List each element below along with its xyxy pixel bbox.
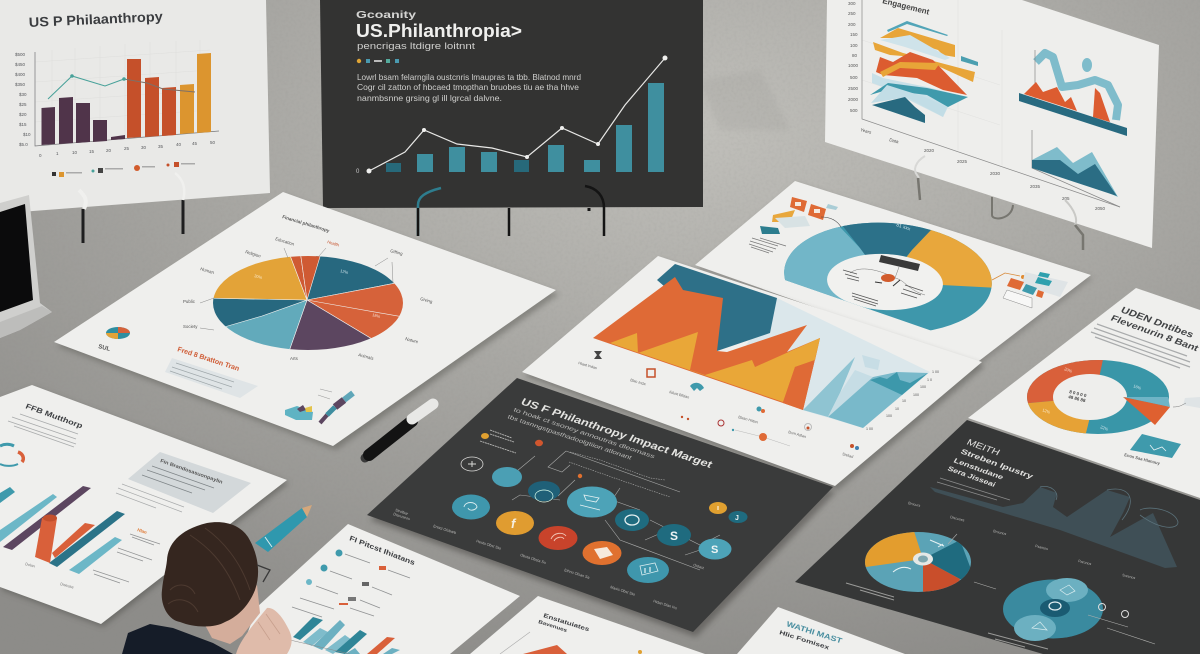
panel: bottom-center sheet (470, 596, 705, 654)
y-axis ticks: 10 (902, 399, 906, 403)
legend icons row: Hlaat Indas (578, 361, 597, 370)
bar chart: $450 (15, 62, 26, 67)
icons: right side tags (992, 272, 1068, 308)
ribbon area chart (1019, 50, 1127, 136)
chart legend (52, 162, 195, 177)
panel: donut chart sheet (695, 181, 1093, 369)
indicator list (292, 550, 410, 617)
small markers (461, 430, 582, 478)
timeline labels: Sorenos (1122, 573, 1136, 580)
legend icons row: Bum Adlan (788, 430, 806, 439)
y-axis ticks: 1 00 (866, 427, 873, 431)
bottom-center title: Bavenues (537, 619, 568, 634)
impact circles (452, 467, 748, 583)
combo chart (356, 56, 668, 175)
bar chart: 20 (106, 148, 112, 153)
legend icons row: Sisitad (842, 452, 854, 459)
axis labels: Data (889, 137, 900, 145)
panel: pie chart sheet (54, 192, 559, 450)
panel: right donut sheet (968, 288, 1200, 498)
pie labels: 12% (340, 268, 349, 275)
circle captions: Ethno Olsan Sa (564, 568, 591, 580)
impact circles: f (511, 516, 517, 531)
axis labels: 205 (1062, 196, 1070, 201)
small area chart (1032, 130, 1120, 207)
bar chart: 40 (176, 142, 182, 147)
axis labels: 100 (850, 43, 858, 48)
bottom-right title: WATHI MAST (785, 619, 844, 645)
small pie icon (98, 327, 130, 353)
mountain silhouette chart (930, 478, 1178, 568)
axis labels: 2500 (848, 86, 859, 91)
bar chart: $5.0 (19, 142, 28, 147)
y-axis ticks: 100 (886, 414, 892, 418)
bar chart: $15 (19, 122, 27, 127)
pie labels: Health (327, 239, 340, 248)
pie labels: Financial philanthropy (282, 214, 330, 233)
circle captions: Hesta Obst Sta (476, 539, 502, 551)
bar chart: 0 (39, 153, 42, 158)
dark sheet heading (946, 437, 1036, 489)
pie labels: 18% (372, 312, 381, 319)
timeline labels: Brocurs (908, 501, 921, 508)
partial ring icon (0, 444, 23, 466)
bar chart: $400 (15, 72, 26, 77)
illustration: bottle and tray (285, 389, 353, 423)
circle captions: Oidast (693, 563, 705, 571)
donut labels: 81 xxx (895, 222, 911, 233)
pie labels: Animals (358, 352, 375, 361)
bar chart: 30 (141, 145, 147, 150)
dark sheet heading: Sera Jisseai (946, 466, 997, 489)
dark sheet heading: Lenstudane (952, 458, 1005, 481)
y-axis ticks: 100 (913, 393, 919, 397)
icon: metal stands right (915, 156, 1083, 250)
bar chart: $350 (15, 82, 26, 87)
bar chart: 25 (124, 146, 130, 151)
bar chart: $20 (19, 112, 27, 117)
left sheet side notes: Dolan (25, 562, 35, 569)
timeline labels: Paronos (1078, 559, 1092, 566)
panel: top-right area chart poster (825, 0, 1159, 248)
ring chart: 20% (1064, 366, 1073, 374)
small pie icon: SUL (98, 344, 111, 353)
bottom-center title (537, 613, 591, 634)
pie labels (183, 214, 434, 361)
hand (236, 608, 292, 654)
panel: bottom indicators sheet (240, 524, 520, 654)
panel: dark impact map sheet (367, 378, 836, 637)
timeline labels: Discuses (950, 515, 965, 523)
axis labels: Years (860, 127, 873, 135)
impact map subtitle: tbs tasnngstpasthadoolgtiion atlonant (506, 415, 633, 461)
panel: bottom-right sheet (737, 607, 905, 654)
icon: poster stands left (79, 173, 184, 243)
panel: dark lower-right sheet (795, 420, 1200, 654)
circle captions: Discuseos (393, 512, 411, 521)
combo chart: 0 (356, 169, 360, 175)
y-axis ticks: 10 (895, 407, 899, 411)
pie labels: Giving (420, 296, 434, 304)
axis labels: 2035 (1030, 184, 1041, 189)
panel: top-center dark poster (320, 0, 703, 208)
legend icons row: Blac Inda (630, 378, 647, 387)
axis labels: 150 (850, 32, 858, 37)
pie labels: Public (183, 299, 196, 304)
pie labels: Arts (290, 356, 299, 361)
impact map subtitle: to hoak ct ssoney annoutras dleomass (512, 408, 656, 460)
ring chart: 12% (1042, 407, 1051, 415)
bar chart: 1 (56, 151, 59, 156)
y-axis ticks: 100 (920, 385, 926, 389)
connector lines (512, 451, 720, 570)
icon: teal folder (1124, 434, 1181, 466)
donut chart (784, 222, 992, 330)
right sheet title: UDEN Dntibes (1119, 304, 1196, 340)
pie labels: Gifting (390, 248, 404, 256)
impact map title: US F Philanthropy Impact Marget (518, 397, 715, 471)
circle captions (393, 508, 705, 610)
axis labels: 500 (850, 75, 858, 80)
icon: blue pencil (255, 505, 312, 552)
person viewing the sheets (122, 522, 292, 654)
axis labels: 500 (850, 108, 858, 113)
axis labels: 2050 (1095, 206, 1106, 211)
right sheet body lines (1091, 324, 1190, 368)
hair with bun (162, 522, 258, 626)
bar chart: 45 (192, 141, 198, 146)
icon: dark poster stands (418, 186, 604, 236)
y-axis ticks (866, 370, 939, 431)
circle captions: Obsta Obsta Su (520, 553, 546, 565)
axis labels: 2025 (957, 159, 968, 164)
circle captions: Strolbar (395, 508, 409, 516)
body copy: Lowrl bsam felarngila oustcnris lmaupras ta tbb. Blatnod mnrd (357, 72, 581, 82)
impact circles: J (735, 515, 739, 522)
pie labels: Education (275, 236, 295, 247)
bar chart: 50 (210, 140, 216, 145)
glasses (257, 565, 270, 582)
donut center diagram (843, 255, 925, 306)
y-axis ticks: 1 00 (932, 370, 939, 374)
bar chart: 15 (89, 149, 95, 154)
axis labels: 2030 (990, 171, 1001, 176)
bottom-center title: Enstatuiates (542, 613, 591, 634)
pie labels: Religion (245, 249, 262, 259)
pie chart (213, 256, 403, 350)
subtitle: pencrigas ltdigre loitnnt (357, 41, 476, 51)
icons: upper left tags (749, 197, 841, 253)
icon: laptop (0, 195, 52, 338)
bar chart: 10 (72, 150, 78, 155)
neck and face (205, 585, 260, 644)
y-axis ticks: 1 0 (927, 378, 932, 382)
pie labels: Nature (405, 336, 419, 345)
callout box (1173, 397, 1200, 408)
bar chart: $10 (23, 132, 31, 137)
poster title: US P Philaanthropy (28, 9, 164, 30)
ring chart: 48 86 88 (1068, 394, 1086, 403)
pie labels: Human (200, 266, 215, 275)
dark sheet circle chart (1003, 578, 1103, 641)
jacket (122, 624, 233, 654)
legend icons row: Blasn Hiitan (738, 415, 758, 425)
dark sheet heading: MEITH (965, 437, 1002, 457)
layered area chart (862, 0, 1120, 207)
circle captions: Hidan Dlan Ins (653, 599, 678, 610)
axis labels: 200 (848, 22, 856, 27)
left sheet side notes: Hlan (137, 527, 148, 535)
panel: area chart sheet (522, 256, 985, 490)
icon: marker pen (365, 404, 433, 458)
impact circles: S (711, 544, 718, 556)
kicker: Gcoanity (356, 10, 417, 21)
grey info box: Fin Brandosasuonpaylin (159, 458, 223, 486)
mountain area chart (593, 264, 930, 428)
dark sheet pie chart (865, 532, 971, 592)
circle side notes (846, 582, 1155, 649)
axis labels: 1000 (848, 63, 859, 68)
legend icons row (578, 351, 859, 459)
indicators title: FI Pitcst Ihiatans (348, 535, 416, 567)
ring chart: 22% (1100, 424, 1109, 432)
body copy: Cogr cil zatton of hbcaed tmopthan bruobes tiu ae tha hhve (357, 82, 579, 92)
grey callout box (165, 358, 258, 398)
impact map subtitle (506, 408, 656, 461)
panel: left bar chart sheet (0, 385, 289, 627)
timeline labels: Brounos (993, 529, 1007, 536)
right sheet title: Flevenurin 8 Bant (1109, 313, 1200, 353)
body copy (357, 72, 581, 103)
left sheet side notes (25, 484, 184, 590)
axis labels: 80 (852, 53, 858, 58)
left sheet body lines (8, 414, 78, 447)
bar chart: $30 (19, 92, 27, 97)
circle captions: Enact Olsbarb (433, 524, 457, 535)
ring chart: 8 0 0 0 0 (1069, 389, 1087, 398)
axis labels (848, 1, 1106, 211)
red callout title: Fred 8 Bratton Tran (176, 346, 240, 373)
indicator bars (290, 617, 400, 654)
ring chart (1027, 360, 1170, 434)
timeline labels: Psantos (1035, 544, 1049, 551)
timeline labels (908, 501, 1136, 580)
axis labels: 2000 (848, 97, 859, 102)
grey info box (128, 452, 251, 513)
axis labels: 250 (848, 11, 856, 16)
dark poster title: US.Philanthropia> (356, 21, 522, 41)
bar chart: $25 (19, 102, 27, 107)
legend icons row: Ildust Blldan (669, 390, 690, 400)
ring chart: 16% (1133, 383, 1142, 391)
axis labels: 300 (848, 1, 856, 6)
bar chart (15, 40, 219, 158)
pie labels: 30% (254, 273, 263, 280)
dark sheet heading: Streben Ipustry (959, 447, 1036, 481)
legend dots (357, 59, 399, 63)
bottom-right subtitle: Hlic Fomisex (778, 630, 831, 652)
left sheet side notes: Disease (60, 582, 74, 590)
body copy: nanmbsnne grsing gl ill lgrcal dalvne. (357, 93, 502, 103)
circle captions: Masis Obst Sta (610, 585, 636, 597)
mini area chart (500, 632, 642, 654)
bar chart: 35 (158, 144, 164, 149)
panel: top-left bar chart poster (0, 0, 270, 214)
left sheet title: FFB Mutthorp (24, 402, 85, 430)
icon: teal folder: Enos Saa Hlanuuy (1124, 452, 1161, 466)
impact circles: S (670, 529, 678, 543)
right sheet title (1109, 304, 1200, 353)
axis labels: 2020 (924, 148, 935, 153)
pie labels: Society (183, 324, 198, 329)
bar chart: $500 (15, 52, 26, 57)
3D bars (0, 486, 125, 574)
